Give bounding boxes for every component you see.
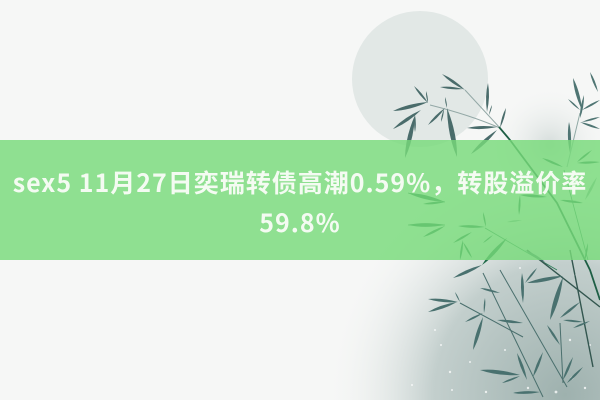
title: sex5 11月27日奕瑞转债高潮0.59%，转股溢价率 (13, 164, 587, 200)
bamboo lower right thicket (428, 249, 600, 397)
bamboo upper right sprig (567, 72, 600, 167)
bamboo middle sprigs behind banner (408, 127, 600, 300)
title: 59.8% (259, 204, 341, 240)
soft shade behind right bamboo (480, 85, 600, 205)
bamboo upper left sprig (392, 73, 507, 158)
speckles (411, 267, 591, 393)
banner (0, 140, 600, 260)
branches (430, 90, 500, 128)
main stalk (499, 127, 600, 300)
mist wash in lower right (300, 130, 600, 400)
moon (352, 11, 488, 147)
title (13, 164, 587, 240)
